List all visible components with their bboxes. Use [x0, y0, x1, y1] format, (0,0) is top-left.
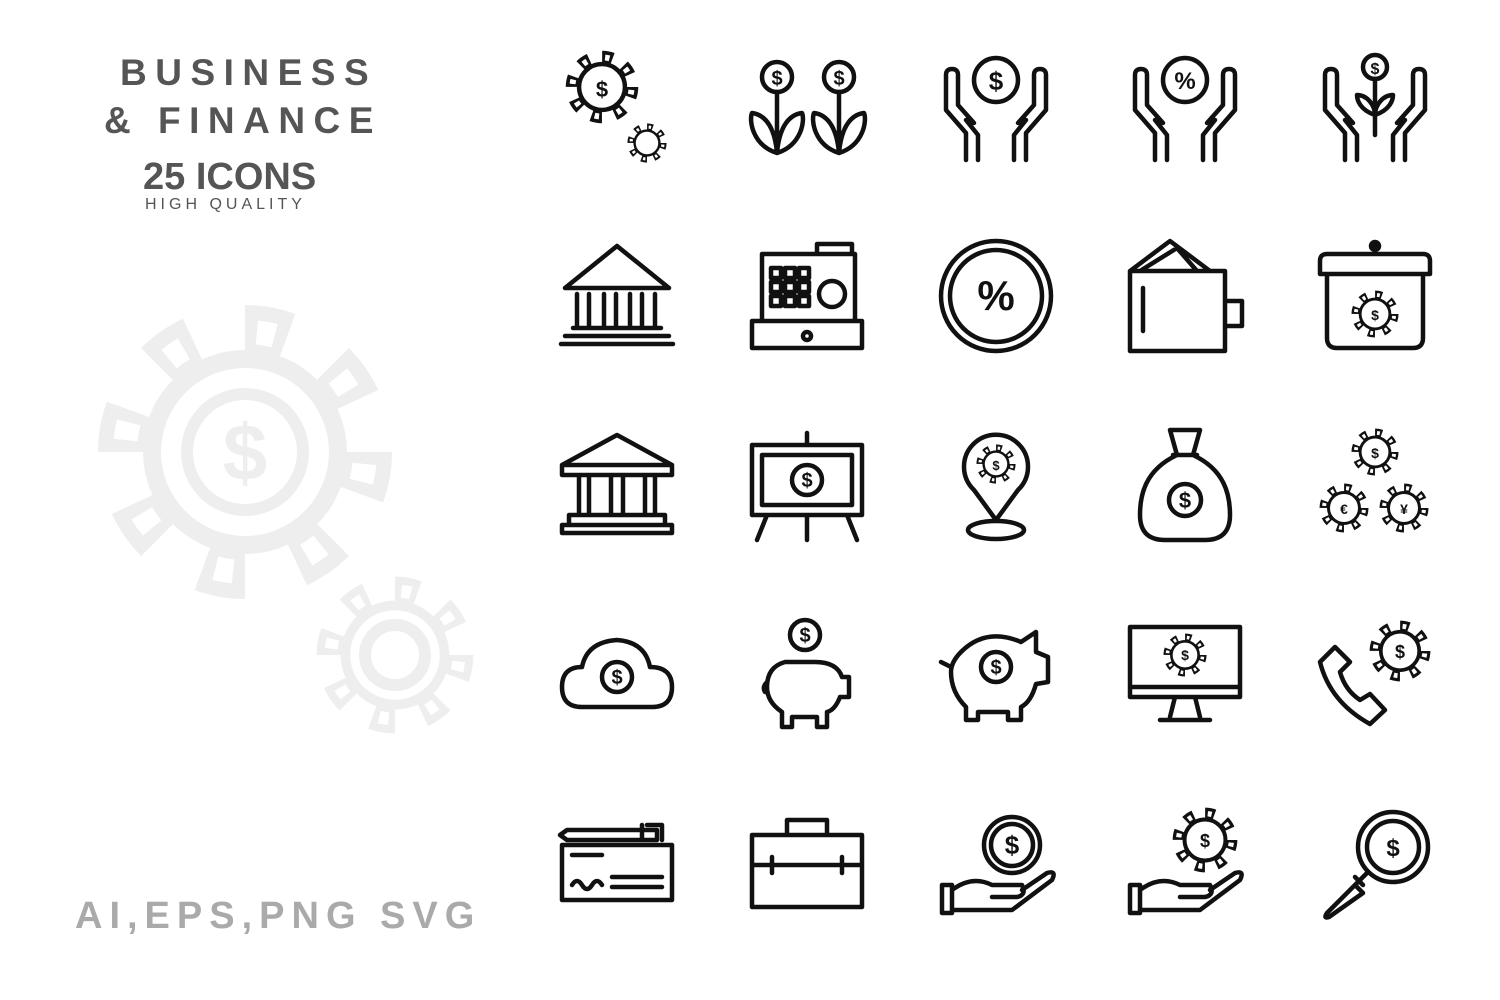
icon: piggy bank — [941, 632, 1048, 720]
subtitle: & FINANCE — [104, 100, 382, 141]
icon: gears dollar: $ — [596, 77, 608, 102]
icon: hands plant — [1325, 55, 1425, 160]
icon: percent badge: % — [977, 272, 1015, 319]
icon: monitor gear: $ — [1181, 647, 1189, 663]
icon: location gear: $ — [992, 458, 1000, 473]
icon: basket gear: $ — [1371, 307, 1379, 323]
icon: currency gears — [1324, 433, 1424, 528]
icon: bank 2 — [562, 435, 672, 533]
icon: hands coin — [946, 58, 1046, 160]
icon: currency gears: ¥ — [1400, 501, 1408, 517]
icon: money plants: $ — [771, 68, 783, 90]
icon: magnifier dollar: $ — [1386, 835, 1400, 862]
icon: piggy coin — [764, 620, 849, 727]
icon: wallet — [1130, 241, 1242, 351]
icon: phone gear: $ — [1395, 642, 1405, 662]
icon: hand coin — [942, 817, 1054, 913]
icon: bank — [561, 246, 673, 344]
icon: money bag — [1140, 430, 1230, 540]
icon: piggy bank: $ — [990, 657, 1002, 679]
icon: toolbox — [752, 820, 862, 907]
icon: hand gear — [1130, 814, 1242, 913]
icon: location gear — [964, 435, 1028, 539]
icon: currency gears: $ — [1371, 445, 1379, 461]
icon: cloud dollar — [562, 640, 672, 707]
icon count: 25 ICONS — [143, 156, 316, 198]
icon: cloud dollar: $ — [611, 667, 623, 689]
icon: basket gear — [1320, 242, 1430, 348]
icon: presentation board — [752, 433, 862, 540]
icon: money bag: $ — [1179, 488, 1191, 513]
icon: phone gear — [1320, 626, 1425, 724]
icon: cheque pen — [560, 825, 672, 900]
icon: cash register — [752, 244, 862, 348]
icon: money plants — [751, 62, 865, 153]
icon: hand coin: $ — [1005, 830, 1020, 860]
icon: percent badge — [941, 241, 1051, 351]
icon: piggy coin: $ — [799, 625, 811, 647]
icon: hands percent — [1135, 58, 1235, 160]
icon: currency gears: € — [1340, 501, 1348, 517]
icon: presentation board: $ — [801, 470, 813, 492]
icon: hands percent: % — [1174, 68, 1196, 95]
icon: money plants: $ — [833, 68, 845, 90]
formats: AI,EPS,PNG SVG — [75, 895, 481, 937]
icon: gears dollar — [572, 57, 663, 159]
title: BUSINESS — [120, 52, 377, 93]
icon: hands coin: $ — [989, 66, 1004, 96]
icon: hand gear: $ — [1200, 831, 1210, 851]
icon: monitor gear — [1130, 627, 1240, 720]
quality label: HIGH QUALITY — [145, 196, 306, 213]
icon: hands plant: $ — [1371, 61, 1380, 78]
background gears: $ — [223, 408, 267, 497]
icon: magnifier dollar — [1325, 812, 1428, 918]
